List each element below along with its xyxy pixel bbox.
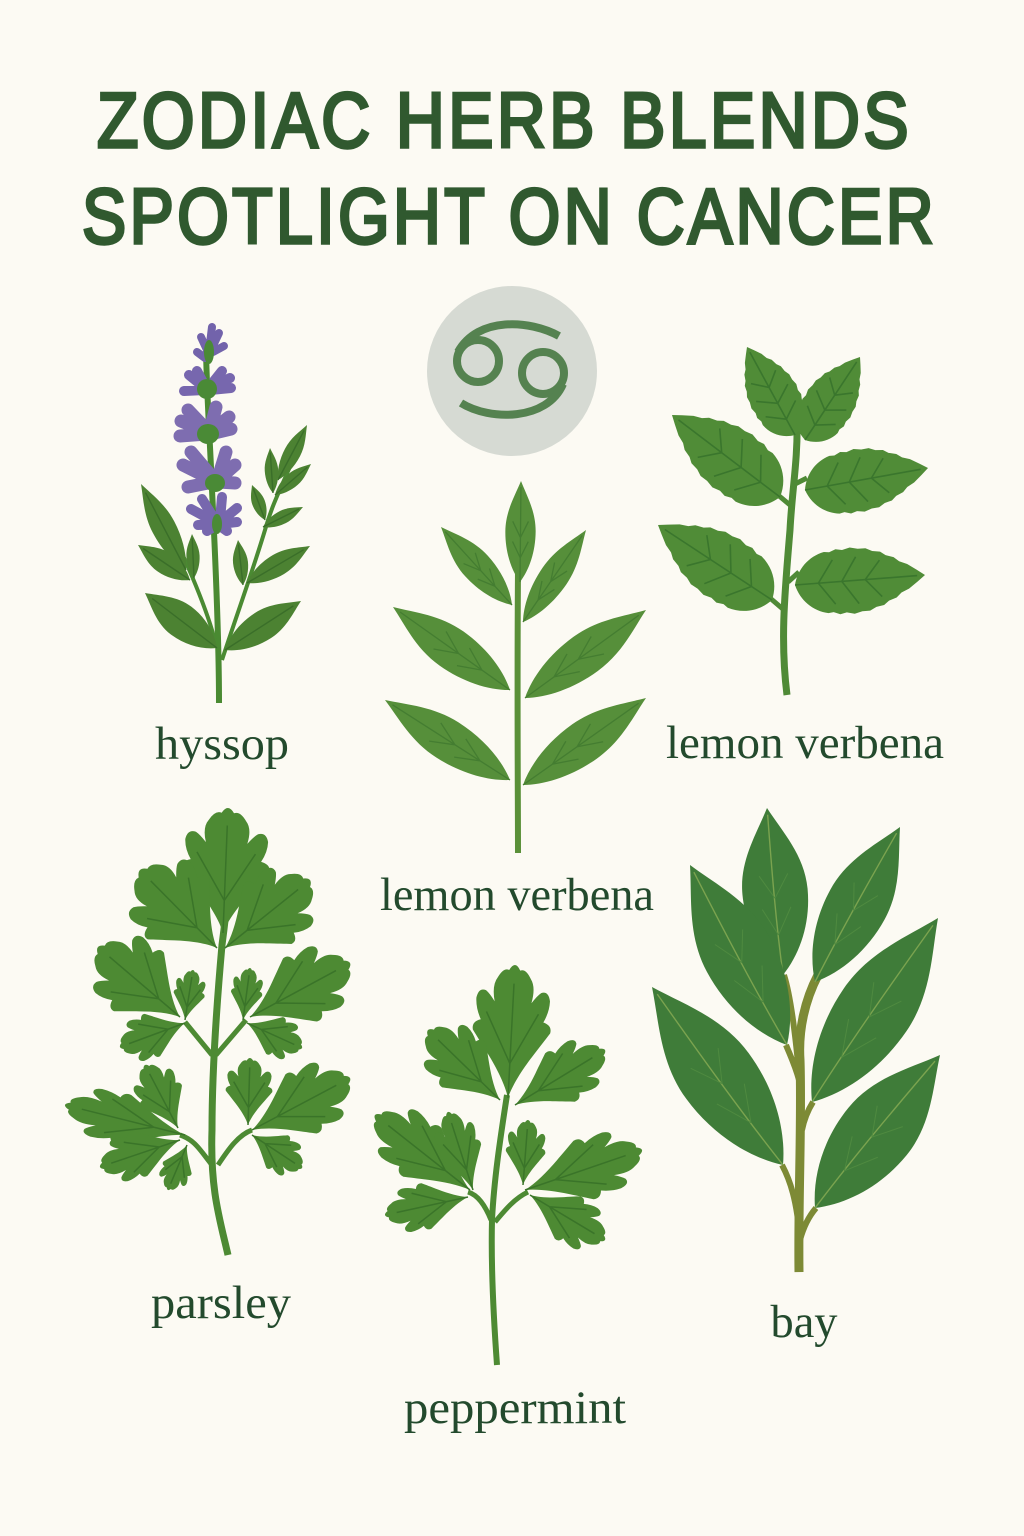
herb: lemon verbena (center) [374,481,658,921]
center verbena label: lemon verbena [380,869,654,921]
title [82,76,937,260]
bay label: bay [770,1296,838,1348]
parsley label: parsley [151,1277,292,1329]
bay plant [621,805,969,1272]
right verbena plant [640,335,934,695]
herb: bay [621,805,969,1348]
herb: parsley [59,806,367,1329]
herb: lemon verbena (right) [640,335,944,769]
herb: peppermint [356,963,652,1434]
peppermint plant [356,963,652,1365]
right verbena label: lemon verbena [666,717,944,769]
herb: hyssop [130,327,316,770]
hyssop plant [130,327,316,703]
center verbena plant [374,481,658,853]
parsley plant [59,806,367,1255]
title line 1: ZODIAC HERB BLENDS [97,76,912,164]
icon: cancer zodiac symbol [427,286,597,456]
peppermint label: peppermint [404,1382,626,1434]
hyssop label: hyssop [155,718,289,770]
